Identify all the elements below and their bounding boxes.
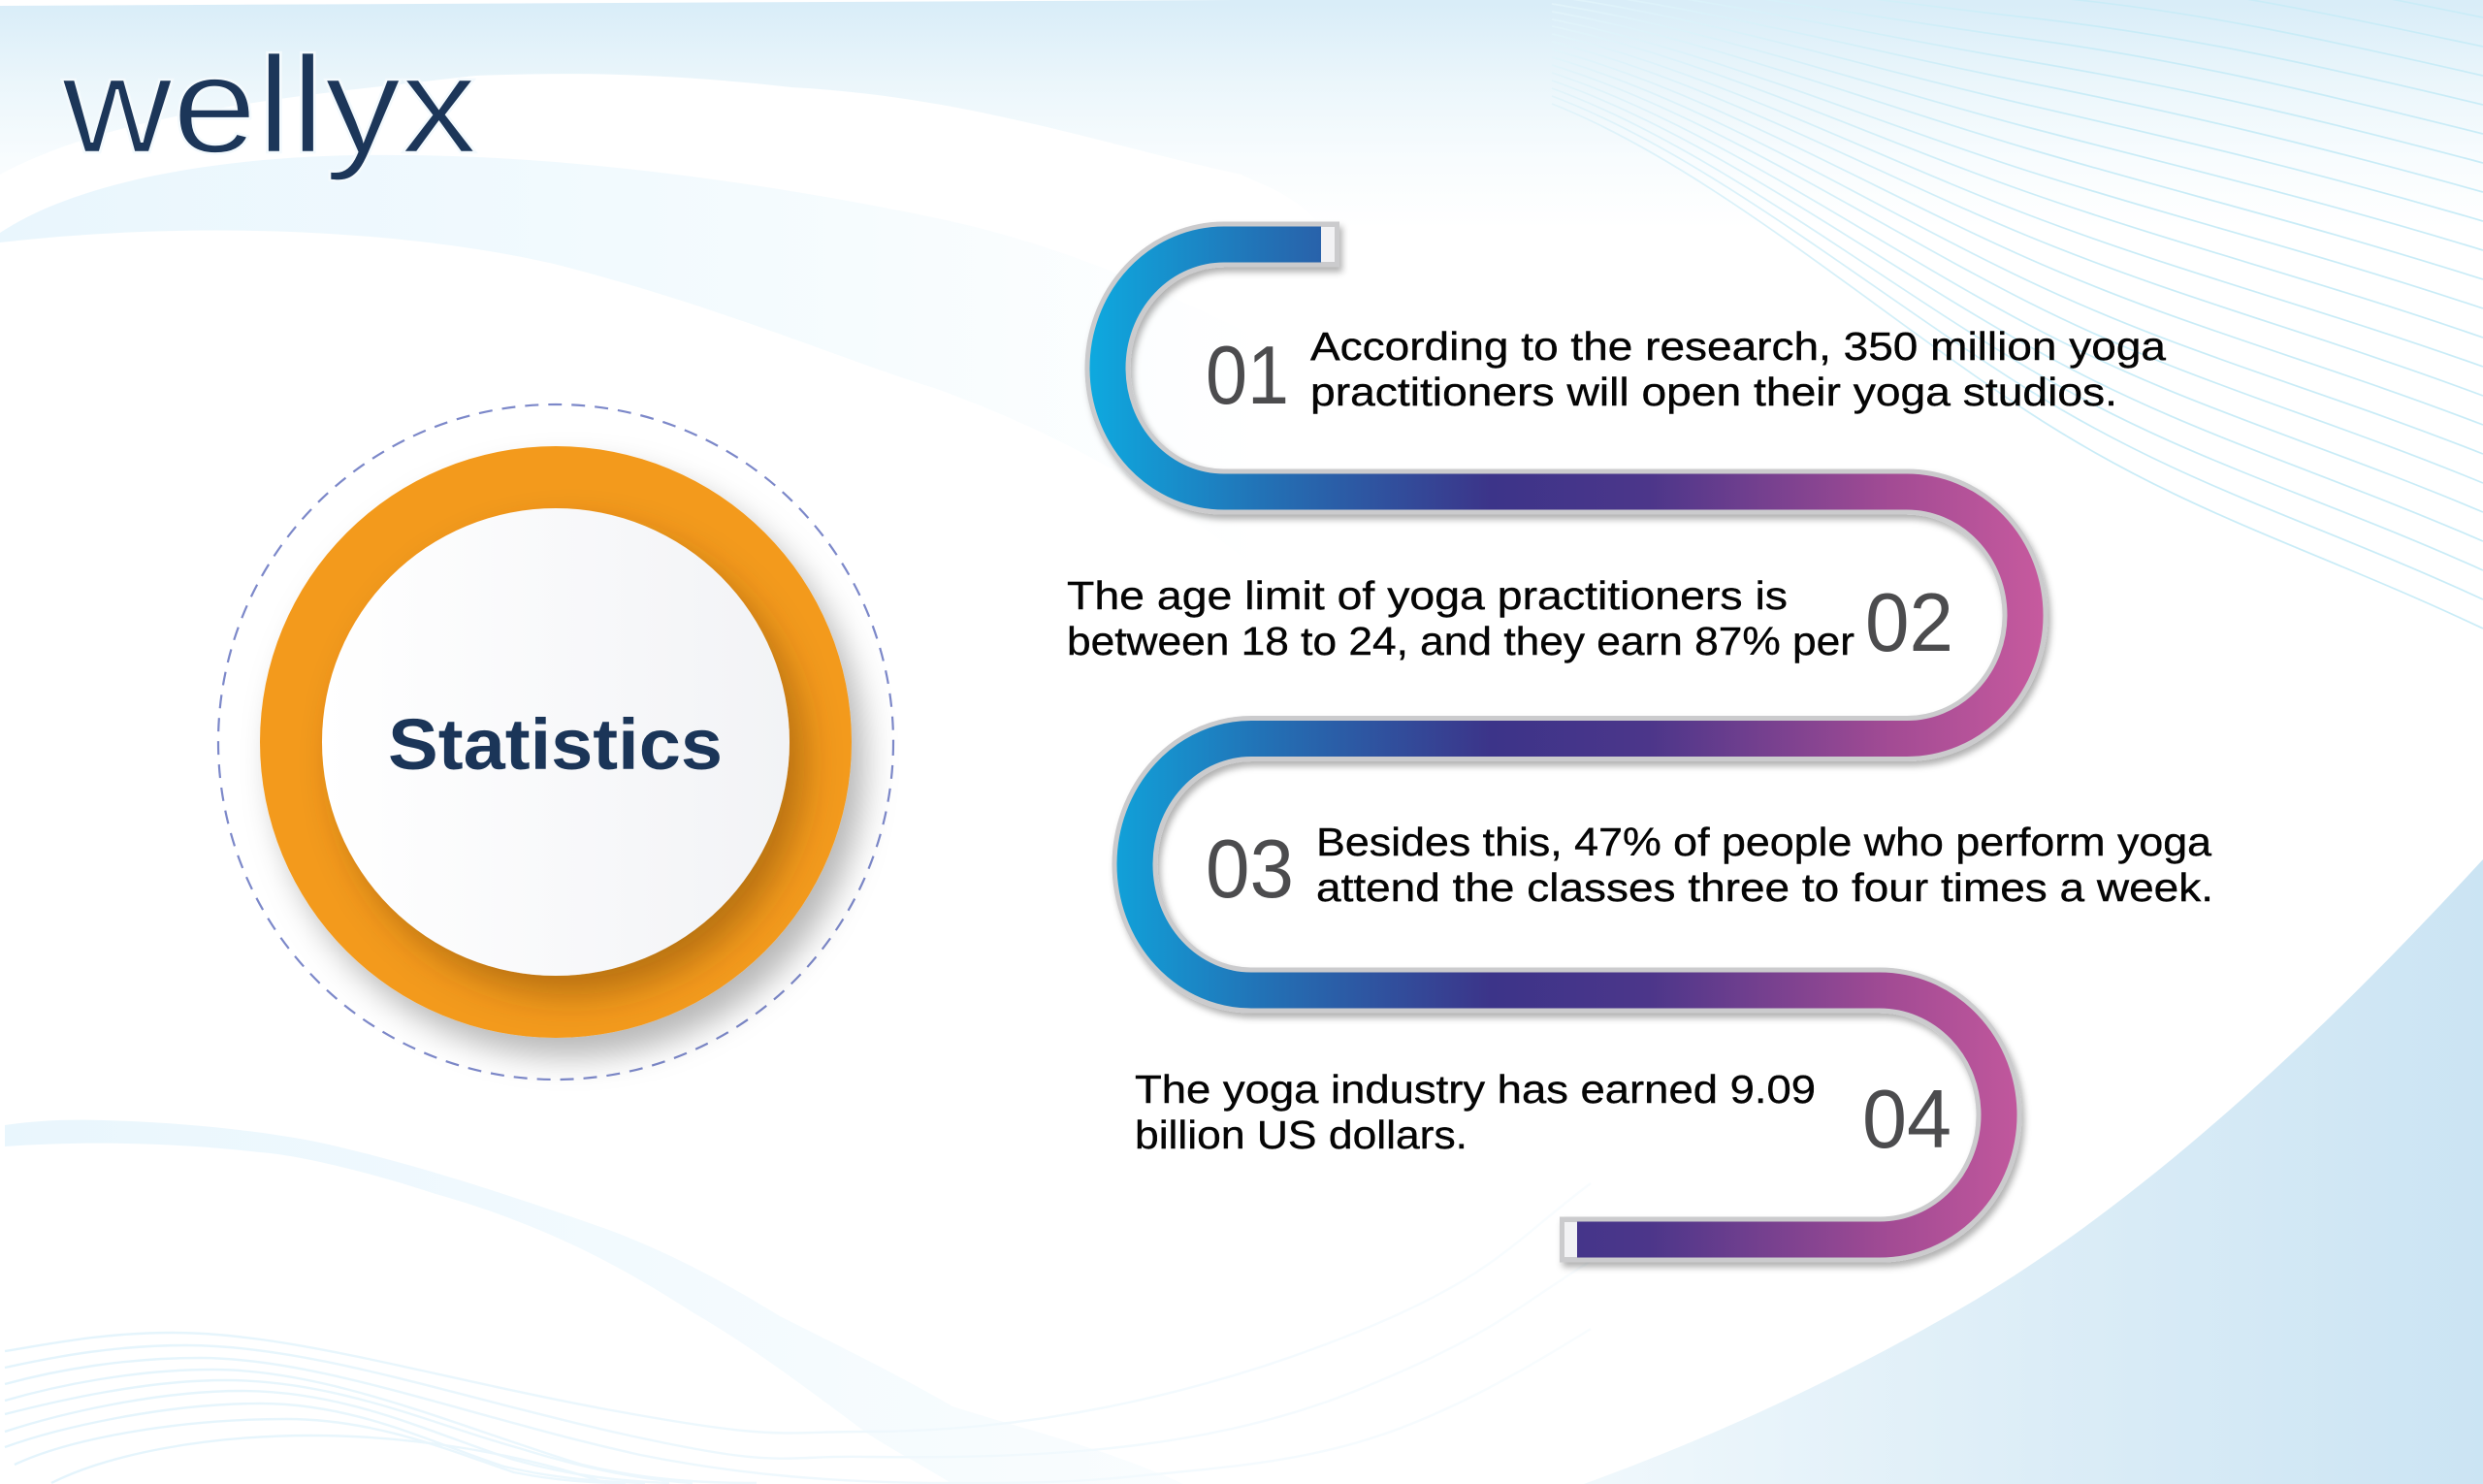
text 04: billion US dollars.	[1135, 1113, 1467, 1157]
number 01: 01	[1206, 330, 1289, 422]
serpentine ribbon	[1108, 227, 2025, 1257]
text 02: between 18 to 24, and they earn 87% per	[1067, 619, 1854, 663]
lower-left swoosh	[5, 1119, 968, 1482]
central circle: Statistics	[218, 404, 893, 1080]
bottom-right corner shape	[1584, 859, 2483, 1484]
number 03: 03	[1206, 823, 1294, 916]
ribbon end caps	[1321, 227, 1577, 1257]
item 02	[1067, 573, 1953, 669]
top gradient band	[0, 0, 2483, 155]
text 02: The age limit of yoga practitioners is	[1067, 573, 1788, 618]
item 04	[1135, 1067, 1951, 1166]
ribbon grey border with shadow	[1108, 244, 2025, 1240]
number 04: 04	[1862, 1074, 1951, 1166]
text 01: practitioners will open their yoga studios.	[1310, 370, 2117, 414]
upper-right line pattern	[1552, 0, 2483, 629]
orange ring	[260, 446, 852, 1038]
logo: wellyx: wellyx	[61, 28, 477, 182]
lower-left line pattern	[4, 1247, 1509, 1484]
text 03: attend the classes three to four times a week.	[1316, 865, 2213, 910]
item 01	[1206, 324, 2166, 422]
dashed outer ring	[218, 404, 893, 1080]
text 04: The yoga industry has earned 9.09	[1135, 1067, 1816, 1112]
text 03: Besides this, 47% of people who perform yoga	[1316, 820, 2211, 864]
number 02: 02	[1865, 577, 1953, 669]
ribbon gradient	[1108, 244, 2025, 1240]
heading: Statistics: Statistics	[388, 704, 723, 785]
inner white disc	[322, 508, 790, 976]
item 03	[1206, 820, 2213, 916]
text 01: According to the research, 350 million yoga	[1310, 324, 2166, 369]
upper-left swoosh	[0, 155, 894, 374]
